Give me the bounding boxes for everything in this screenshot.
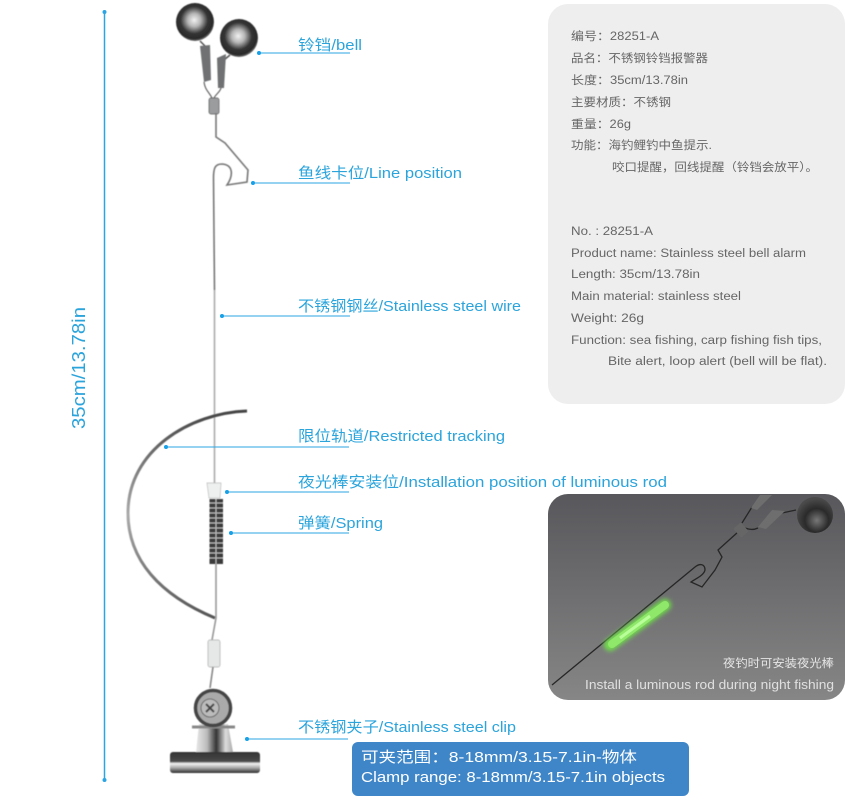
caption: night fishing English: Install a luminous rod during night fishing: [585, 678, 834, 692]
label: stainless steel wire: 不锈钢钢丝/Stainless steel wire: [298, 298, 521, 315]
text block: Chinese specifications: 长度：35cm/13.78in: [571, 73, 688, 87]
label: stainless steel clip: 不锈钢夹子/Stainless steel clip: [298, 719, 516, 736]
icon: bells: [176, 3, 258, 57]
text block: English specifications: Function: sea fishing, carp fishing fish tips,: [571, 335, 822, 347]
text block: English specifications: Main material: stainless steel: [571, 291, 741, 303]
icon: bell swivels: [200, 41, 230, 114]
text block: Chinese specifications: 功能：海钓鲤钓中鱼提示.: [571, 138, 712, 152]
label: luminous rod position: [225, 474, 667, 494]
text block: Chinese specifications: 编号：28251-A: [571, 29, 659, 43]
text block: English specifications: [571, 226, 827, 368]
icon: connectors: [733, 495, 785, 538]
panel: night fishing photo: [548, 494, 845, 700]
label: luminous rod position: 夜光棒安装位/Installation position of luminous rod: [298, 474, 667, 491]
text block: English specifications: Weight: 26g: [571, 313, 644, 325]
icon: stainless steel clip: [170, 690, 260, 773]
text block: Chinese specifications: 重量：26g: [571, 117, 631, 131]
icon: glowing rod: [610, 605, 665, 645]
dimension line: overall length: [102, 10, 106, 782]
label: bell: 铃铛/bell: [298, 37, 362, 54]
label: spring: [229, 515, 383, 535]
label: restricted tracking: 限位轨道/Restricted tracking: [298, 428, 505, 445]
label: stainless steel clip: [245, 719, 516, 741]
text block: Chinese specifications: 主要材质：不锈钢: [571, 95, 671, 109]
icon: night bell: [797, 497, 833, 533]
text block: English specifications: Length: 35cm/13.78in: [571, 269, 700, 281]
label: bell: [257, 37, 362, 55]
label: line position: 鱼线卡位/Line position: [298, 164, 462, 182]
panel: specifications: [548, 4, 845, 404]
text block: Chinese specifications: 品名：不锈钢铃铛报警器: [571, 51, 709, 65]
callout: clamp range: Clamp range: 8-18mm/3.15-7.1in objects: [361, 769, 665, 786]
text block: English specifications: Product name: Stainless steel bell alarm: [571, 248, 806, 260]
icon: rod with hook: [552, 507, 796, 685]
text block: Chinese specifications: [571, 29, 818, 174]
icon: lower wire and connector: [208, 564, 220, 688]
callout: clamp range: 可夹范围：8-18mm/3.15-7.1in-物体: [361, 749, 637, 766]
label: spring: 弹簧/Spring: [298, 515, 383, 532]
icon: luminous rod sleeve: [207, 483, 221, 498]
text block: English specifications: No. : 28251-A: [571, 226, 653, 238]
icon: stainless steel wire: [214, 290, 216, 484]
text block: English specifications: Bite alert, loop alert (bell will be flat).: [608, 356, 827, 368]
caption: night fishing Chinese: 夜钓时可安装夜光棒: [723, 656, 835, 670]
label: restricted tracking: [164, 428, 505, 449]
product illustration: bell alarm: [128, 3, 260, 773]
label: stainless steel wire: [220, 298, 521, 318]
icon: line position hook: [214, 113, 248, 290]
icon: spring: [210, 499, 223, 564]
callout: clamp range: [352, 742, 689, 796]
dimension text: 35cm/13.78in: [69, 307, 89, 429]
text block: Chinese specifications: 咬口提醒，回线提醒（铃铛会放平）。: [612, 160, 818, 174]
label: line position: [251, 164, 462, 185]
icon: restricted tracking arc: [128, 411, 247, 618]
